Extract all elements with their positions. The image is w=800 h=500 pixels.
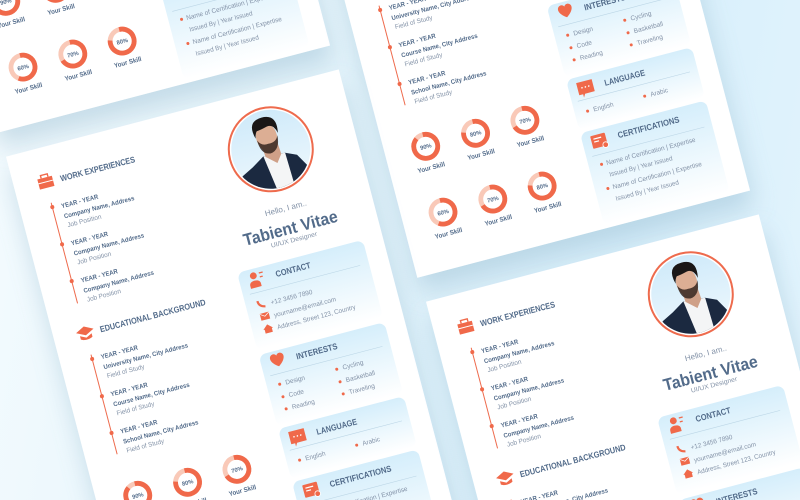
work experiences section: YEAR - YEAR [70,231,109,247]
education timeline: YEAR - YEAR [408,70,446,87]
icon: heart [269,352,286,368]
icon: briefcase [457,318,474,335]
panel: language: LANGUAGE [603,67,646,88]
panel: interests: Design [285,375,306,387]
card: top left resume (partial) [0,0,330,133]
name block [237,192,341,256]
skill donuts: Your Skill [516,135,545,149]
work experiences section: WORK EXPERIENCES [59,154,136,183]
skill donuts: Your Skill [417,161,446,175]
panel: certifications: Issued By | Year Issued [615,179,680,203]
panel: certifications: Name of Certification | Expertise [606,137,697,167]
skill donuts: 70% [487,196,499,205]
icon: briefcase [37,173,54,190]
panel: certifications [292,449,442,500]
education timeline: Field of Study [404,52,444,68]
education timeline: Course Name, City Address [401,33,479,59]
skill donuts: Your Skill [434,227,463,241]
work experiences section: Job Position [86,288,122,304]
name block: Hello, I am.. [264,199,308,218]
skill donuts: Your Skill [484,214,513,228]
skill donuts [121,454,257,500]
panel: certifications: CERTIFICATIONS [616,114,681,140]
skill donuts: 70% [67,51,79,60]
panel: contact: +12 3456 7890 [690,434,734,452]
panel: language: English [593,101,615,113]
panel: interests: INTERESTS [295,341,339,361]
work experiences section: YEAR - YEAR [490,376,529,392]
panel: language [278,396,417,479]
panel: interests: Code [576,39,593,50]
panel: interests: Cycling [630,10,653,23]
icon: certificate [302,481,321,500]
work experiences section: Company Name, Address [483,340,556,365]
work experiences section: Company Name, Address [83,269,155,295]
panel: interests [259,322,403,427]
skill donuts: Your Skill [533,201,562,215]
icon: mail [680,457,690,466]
skill donuts [0,0,142,96]
name block: Hello, I am.. [684,344,728,363]
panel: contact [657,385,800,495]
work experiences section: YEAR - YEAR [481,339,519,355]
panel: interests: Cycling [342,359,365,372]
educational background section: EDUCATIONAL BACKGROUND [99,297,207,334]
skill donuts: 80% [469,130,482,139]
work experiences section: Company Name, Address [493,377,565,403]
work experiences section: Job Position [506,433,542,449]
work experiences section: WORK EXPERIENCES [479,299,556,328]
work experiences section: YEAR - YEAR [80,268,119,285]
work experiences section: Job Position [487,358,523,374]
educational background section [495,440,657,500]
skill donuts: Your Skill [467,148,496,162]
card: left main resume [6,69,462,500]
panel: language: English [305,450,327,462]
panel: interests: Basketball [345,370,376,384]
education timeline: School Name, City Address [410,70,488,97]
skill donuts: Your Skill [47,3,76,17]
name block: Tabient Vitae [661,352,760,395]
icon: phone [677,444,685,453]
panel: certifications: CERTIFICATIONS [328,463,393,489]
education timeline [377,0,499,109]
skill donuts: Your Skill [64,69,93,83]
skill donuts: 80% [536,183,549,192]
card: top right resume (partial) [294,0,750,278]
work experiences section [457,296,588,453]
name block [657,337,761,401]
name block: UI/UX Designer [690,376,739,395]
panel: certifications [580,100,730,225]
panel: interests: Reading [579,49,604,62]
profile photo [648,251,734,338]
work experiences section: Job Position [496,396,532,411]
work experiences section: Company Name, Address [503,414,575,440]
icon: chat bubble [576,79,596,99]
icon: home [262,323,274,334]
skill donuts: 90% [420,143,432,152]
panel: contact [237,240,383,350]
icon: chat bubble [288,428,308,448]
work experiences section: YEAR - YEAR [500,413,539,430]
panel: certifications: Issued By | Year Issued [195,34,260,58]
education timeline: Field of Study [414,89,454,106]
icon: graduation cap [75,324,96,342]
panel: interests: Traveling [348,383,376,396]
icon: heart [557,3,574,19]
icon: heart [689,497,706,500]
name block: UI/UX Designer [270,231,319,250]
panel: interests: Traveling [636,34,664,47]
panel: certifications [160,0,310,80]
educational background section: YEAR - YEAR [100,345,139,361]
work experiences section: Company Name, Address [73,232,145,258]
panel: language [566,47,705,130]
educational background section: EDUCATIONAL BACKGROUND [519,442,627,479]
panel: certifications: Issued By | Year Issued [189,10,254,34]
panel: language: Arabic [362,436,382,448]
icon: graduation cap [495,469,516,487]
educational background section: Field of Study [116,401,156,417]
educational background section: YEAR - YEAR [110,382,149,398]
panel: contact: Address, Street 123, Country [276,304,357,331]
panel: contact: CONTACT [694,405,732,424]
work experiences section [37,151,168,308]
skill donuts: Your Skill [14,82,43,96]
skill donuts: 60% [17,64,30,73]
icon: certificate [590,132,609,151]
educational background section: University Name, City Address [103,342,189,371]
card: lower right resume [426,214,800,500]
skill donuts: 70% [519,117,532,126]
educational background section: YEAR - YEAR [120,419,158,436]
icon: home [682,468,694,479]
panel: certifications: Name of Certification | Expertise [612,161,703,191]
educational background section: Field of Study [106,363,146,380]
panel: interests [547,0,691,78]
panel: contact: CONTACT [274,260,312,279]
icon: contact person [667,415,686,434]
work experiences section: YEAR - YEAR [61,194,99,210]
skill donuts: 70% [231,466,244,475]
panel: interests: Reading [291,398,316,411]
panel: contact: yourname@email.com [273,296,337,319]
panel: interests: Code [288,388,305,399]
educational background section: Course Name, City Address [113,382,191,408]
panel: interests: Design [573,26,594,38]
skill donuts: 60% [437,209,450,218]
panel: contact: +12 3456 7890 [270,289,314,307]
work experiences section: Company Name, Address [63,195,136,220]
panel: language: LANGUAGE [315,416,358,437]
panel: interests [679,467,800,500]
icon: phone [257,299,265,308]
skill donuts: 80% [116,38,129,47]
icon: contact person [247,270,266,289]
educational background section: Field of Study [126,438,166,455]
profile photo [228,106,314,192]
panel: certifications: Name of Certification | Expertise [192,16,283,46]
educational background section: School Name, City Address [122,419,200,446]
skill donuts: Your Skill [113,56,142,70]
skill donuts [409,105,562,241]
work experiences section: Job Position [76,251,112,266]
panel: language: Arabic [650,87,670,99]
skill donuts: 80% [181,479,194,488]
education timeline: YEAR - YEAR [398,33,437,49]
work experiences section: Job Position [67,213,103,229]
panel: contact: yourname@email.com [693,441,757,464]
skill donuts: Your Skill [228,484,257,498]
panel: contact: Address, Street 123, Country [696,449,777,476]
panel: certifications: Issued By | Year Issued [609,155,674,179]
panel: interests: Basketball [633,21,664,35]
name block: Tabient Vitae [241,207,340,250]
icon: mail [260,312,270,321]
education timeline: Field of Study [394,14,434,31]
educational background section [75,295,238,459]
